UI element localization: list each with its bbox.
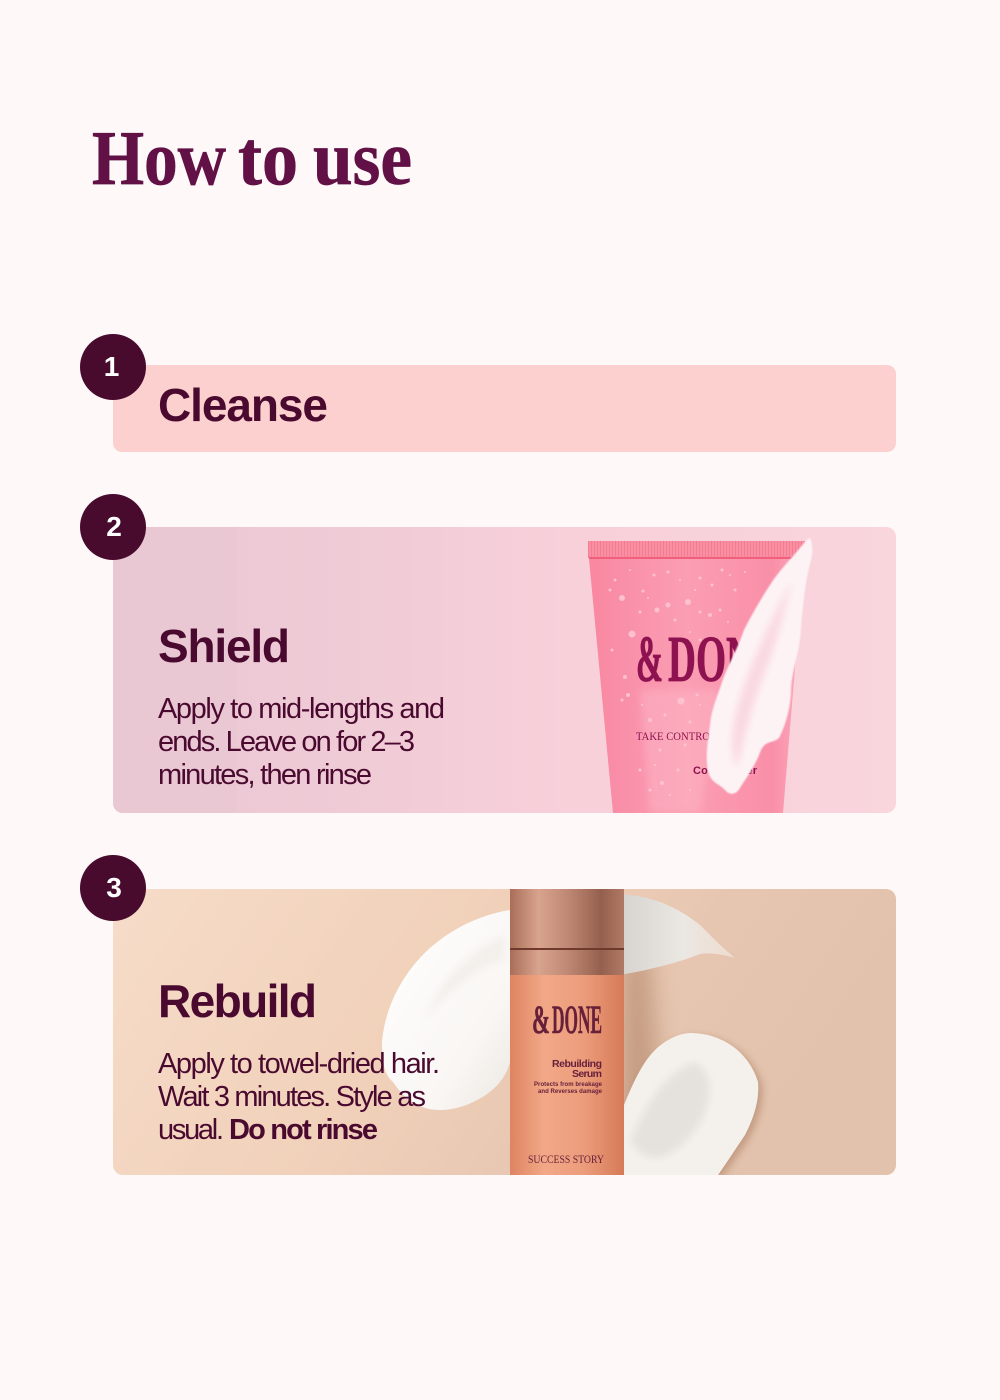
bottle label: Serum (572, 1068, 602, 1080)
badge: step 3: 3 (106, 872, 122, 903)
droplets (608, 568, 746, 796)
text: rebuild instructions: Wait 3 minutes. Style as (158, 1081, 426, 1113)
badge: step 1 (80, 334, 146, 400)
text: shield instructions: minutes, then rinse (158, 759, 372, 791)
heading: cleanse: Cleanse (158, 379, 328, 431)
title: How (92, 115, 226, 201)
bottle label: Rebuilding (552, 1058, 602, 1070)
text: rebuild instructions: Apply to towel-dried hair. (158, 1048, 440, 1080)
heading: shield: Shield (158, 620, 290, 672)
bottle label (528, 1058, 604, 1166)
product: pink conditioner tube (588, 538, 812, 813)
bottle label: and Reverses damage (538, 1089, 603, 1095)
cream swatch top right (620, 894, 735, 975)
badge: step 3 (80, 855, 146, 921)
title: use (313, 115, 412, 201)
bottle cap (510, 889, 624, 975)
text: rebuild instructions: usual. (158, 1114, 224, 1146)
product: serum bottle and cream swatches: DONE (552, 997, 602, 1042)
text: shield instructions: ends. Leave on for 2–3 (158, 726, 415, 758)
title (92, 115, 412, 201)
panel: step 3 rebuild (113, 889, 896, 1178)
cream swatch lower right (620, 1033, 762, 1178)
text: shield instructions: Apply to mid-lengths and (158, 693, 445, 725)
panel: step 1 cleanse (113, 365, 896, 452)
cream smear (707, 538, 812, 794)
tube logo (638, 636, 739, 682)
bottle logo: & (532, 997, 550, 1042)
text: rebuild instructions (158, 1048, 440, 1146)
badge: step 2 (80, 494, 146, 560)
tube logo: & (636, 623, 663, 696)
cream swatch left (382, 910, 510, 1110)
badge: step 2: 2 (106, 511, 122, 542)
bottle label: Protects from breakage (534, 1082, 603, 1088)
text: shield instructions (158, 693, 445, 791)
title: to (238, 115, 298, 201)
badge: step 1: 1 (104, 351, 119, 382)
panel: step 2 shield (113, 527, 896, 813)
text: rebuild instructions: Do not rinse (229, 1114, 378, 1146)
bottle logo (533, 1006, 602, 1034)
bottle label: SUCCESS STORY (528, 1152, 604, 1166)
tube tagline: TAKE CONTRO (636, 729, 710, 743)
bottle body (510, 975, 624, 1175)
heading: rebuild: Rebuild (158, 975, 317, 1027)
tube product name: Conditioner (693, 765, 758, 777)
product: serum bottle and cream swatches (382, 889, 762, 1178)
tube logo: DON (668, 623, 754, 696)
